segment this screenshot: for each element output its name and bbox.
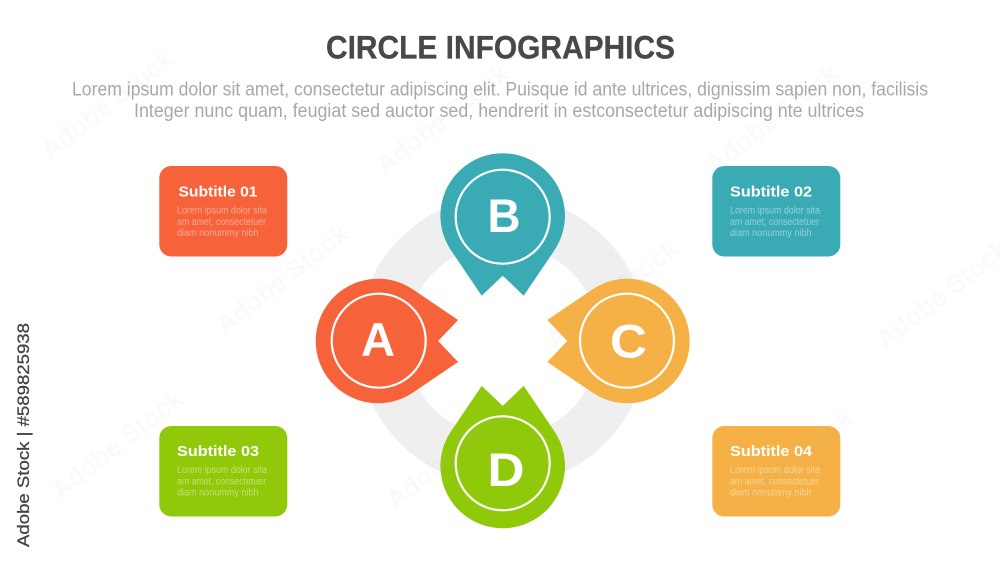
pin A: A	[361, 313, 395, 366]
faint stock watermarks: Adobe Stock	[45, 383, 189, 505]
pin C	[547, 279, 690, 403]
card: subtitle 02: diam nonummy nibh	[730, 228, 812, 239]
card: subtitle 02: am amet, consectetuer	[730, 217, 820, 228]
faint stock watermarks: Adobe Stock	[700, 58, 844, 180]
intro text block: Integer nunc quam, feugiat sed auctor sed, hendrerit in estconsectetur adipiscing nte ultrices	[134, 101, 864, 122]
pin B: B	[488, 189, 520, 242]
pin B	[440, 153, 565, 296]
pin A	[316, 279, 458, 403]
card: subtitle 04	[712, 426, 840, 516]
card: subtitle 01: am amet, consectetuer	[177, 217, 267, 228]
card: subtitle 04: diam nonummy nibh	[730, 488, 812, 498]
intro text block	[72, 80, 928, 122]
card: subtitle 01	[159, 166, 287, 256]
card: subtitle 01: Lorem ipsum dolor sita	[177, 206, 267, 216]
background ring	[382, 220, 624, 462]
pin D	[440, 386, 565, 528]
card: subtitle 02: Lorem ipsum dolor sita	[730, 206, 820, 216]
intro text block: Lorem ipsum dolor sit amet, consectetur adipiscing elit. Puisque id ante ultrices, dignissim sapien non, facilisis	[72, 80, 928, 100]
card: subtitle 02: Subtitle 02	[730, 185, 812, 201]
card: subtitle 04: Subtitle 04	[730, 444, 812, 460]
card: subtitle 01: Subtitle 01	[178, 185, 258, 201]
card: subtitle 04: am amet, consectetuer	[730, 476, 820, 488]
card: subtitle 03: Lorem ipsum dolor sita	[177, 465, 267, 476]
faint stock watermarks: Adobe Stock	[35, 43, 179, 165]
card: subtitle 02	[712, 166, 840, 256]
title: CIRCLE INFOGRAPHICS	[326, 30, 675, 66]
stock id side label: Adobe Stock | #589825938	[14, 323, 33, 547]
card: subtitle 03	[159, 426, 287, 516]
faint stock watermarks: Adobe Stock	[370, 58, 514, 180]
pin C: C	[610, 314, 647, 368]
card: subtitle 03: diam nonummy nibh	[177, 488, 258, 498]
faint stock watermarks: Adobe Stock	[380, 393, 524, 515]
faint stock watermarks: Adobe Stock	[210, 218, 354, 340]
pin D: D	[488, 443, 524, 496]
card: subtitle 04: Lorem ipsum dolor sita	[730, 465, 820, 476]
card: subtitle 03: am amet, consectetuer	[177, 476, 267, 488]
card: subtitle 01: diam nonummy nibh	[177, 228, 258, 239]
faint stock watermarks: Adobe Stock	[540, 233, 684, 355]
card: subtitle 03: Subtitle 03	[177, 444, 259, 460]
faint stock watermarks: Adobe Stock	[715, 403, 859, 525]
